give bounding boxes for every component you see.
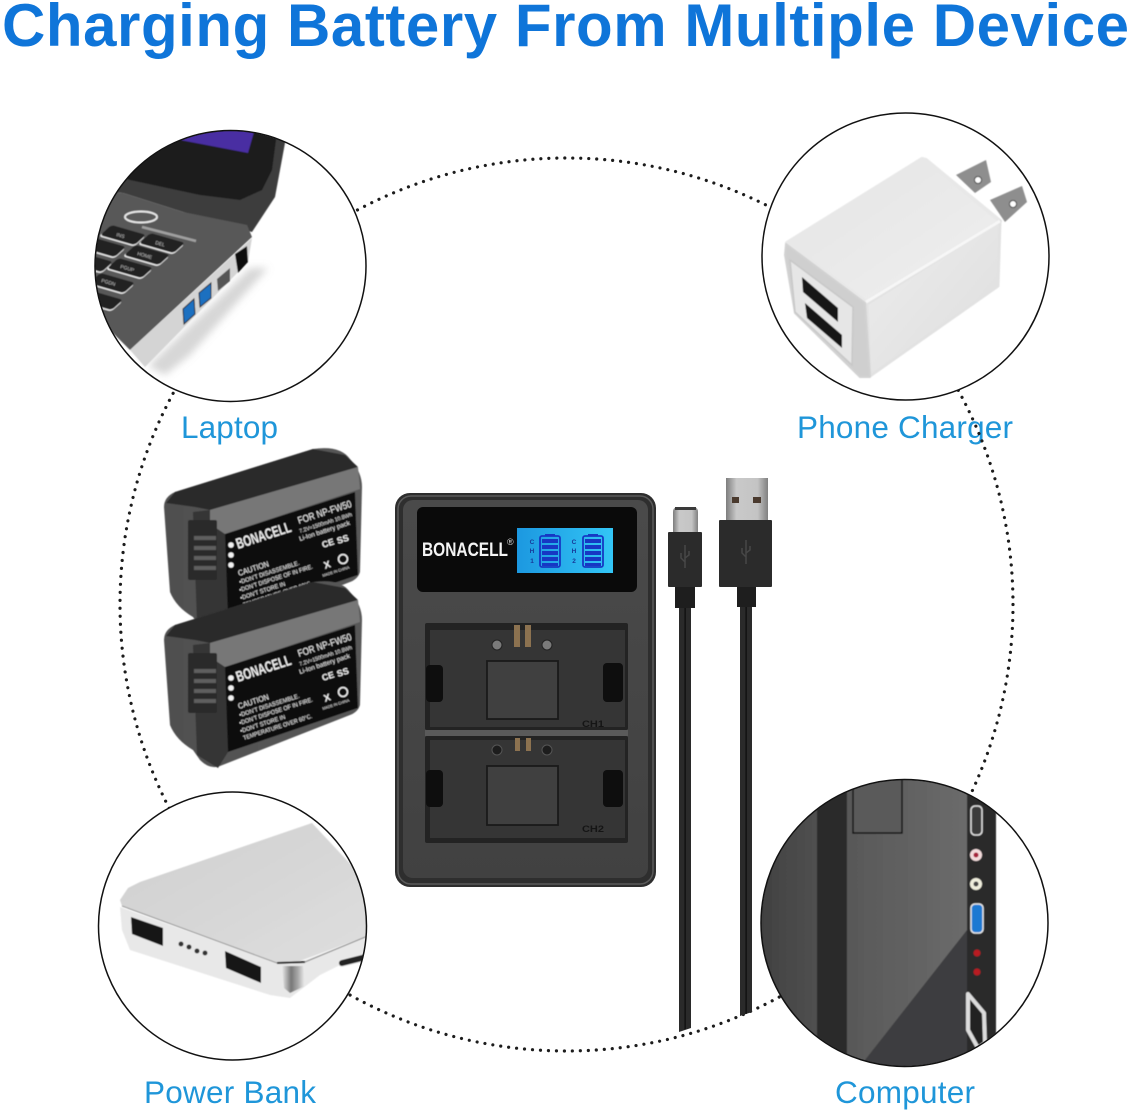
laptop ports: [183, 246, 248, 324]
battery label text: Li-Ion battery pack: [298, 520, 352, 543]
battery label text: •DON'T DISPOSE OF IN FIRE.: [239, 564, 314, 594]
display window: [417, 507, 637, 592]
battery label text: •DON'T STORE IN: [240, 715, 286, 735]
panel: laptop circle: [94, 130, 367, 402]
charger prongs: [956, 160, 1027, 222]
metal corner: [282, 966, 305, 993]
brand name: BONACELL: [422, 539, 508, 561]
USB ports: [131, 917, 261, 983]
LED indicators: [178, 942, 208, 956]
battery slot CH1: CH1: [582, 719, 605, 730]
battery label text: •DON'T DISASSEMBLE.: [239, 561, 301, 586]
USB-A cable: [719, 478, 772, 1016]
USB-C cable: [668, 507, 702, 1032]
battery label text: CAUTION: [237, 559, 270, 578]
battery label text: •DON'T DISPOSE OF IN FIRE.: [239, 697, 314, 727]
battery label text: MADE IN CHINA: [322, 565, 350, 578]
battery label text: 7.2V=1500mAh 10.8Wh: [299, 645, 353, 668]
charger USB ports: [802, 277, 842, 348]
battery pack: front battery: [164, 581, 362, 768]
LCD battery indicator: 2: [572, 558, 576, 565]
battery label text: [228, 499, 354, 609]
dual charger dock: [395, 493, 656, 887]
battery label text: CE: [321, 537, 336, 550]
label: Phone Charger: Phone Charger: [797, 409, 1013, 445]
LCD battery indicator: 1: [530, 558, 534, 565]
keyboard keys: DEL: [154, 240, 166, 249]
label: Computer: Computer: [835, 1074, 975, 1110]
battery label text: CE: [321, 670, 336, 683]
micro USB port: [338, 954, 363, 967]
front panel ports: [968, 806, 985, 1048]
battery label text: FOR NP-FW50: [297, 632, 354, 660]
battery label text: [228, 632, 354, 742]
panel: power bank circle: [98, 792, 370, 1060]
battery slot CH2: [425, 736, 628, 843]
icon: USB symbol: [742, 540, 750, 564]
battery label text: SS: [336, 666, 350, 679]
label: Power Bank: Power Bank: [144, 1074, 316, 1110]
battery label text: 7.2V=1500mAh 10.8Wh: [299, 512, 353, 535]
label: Laptop: Laptop: [181, 409, 278, 445]
battery label text: CAUTION: [237, 692, 270, 711]
battery label text: •DON'T STORE IN: [240, 582, 286, 602]
keyboard keys: PGDN: [100, 278, 116, 288]
battery label text: FOR NP-FW50: [297, 499, 354, 527]
icon: power ring: [125, 212, 157, 222]
panel: phone charger circle: [762, 113, 1049, 400]
battery pack: rear battery: [164, 448, 362, 635]
LCD battery indicator: C: [530, 539, 535, 546]
LCD battery indicator: [517, 528, 613, 573]
battery label text: BONACELL: [234, 519, 293, 553]
battery label text: X: [323, 692, 333, 705]
battery label text: BONACELL: [234, 652, 293, 686]
battery slot CH2: CH2: [582, 824, 604, 835]
battery label text: TEMPERATURE OVER 60°C.: [243, 714, 313, 742]
LCD battery indicator: C: [572, 539, 577, 546]
dotted ring connecting devices: [120, 158, 1013, 1051]
icon: USB symbol: [681, 545, 689, 568]
battery label text: •DON'T DISASSEMBLE.: [239, 694, 301, 719]
battery label text: X: [323, 559, 333, 572]
keyboard keys: [96, 225, 184, 312]
keyboard keys: PGUP: [119, 264, 135, 274]
battery label text: SS: [336, 533, 350, 546]
keyboard keys: HOME: [136, 251, 153, 261]
battery label text: TEMPERATURE OVER 60°C.: [243, 581, 313, 609]
keyboard keys: INS: [115, 232, 126, 240]
battery label text: Li-Ion battery pack: [298, 653, 352, 676]
LCD battery indicator: H: [530, 548, 535, 555]
battery slot CH1: [425, 623, 628, 730]
display window: ®: [507, 537, 514, 547]
panel: computer circle: [755, 772, 1048, 1071]
LCD battery indicator: H: [572, 548, 577, 555]
battery label text: MADE IN CHINA: [322, 698, 350, 711]
